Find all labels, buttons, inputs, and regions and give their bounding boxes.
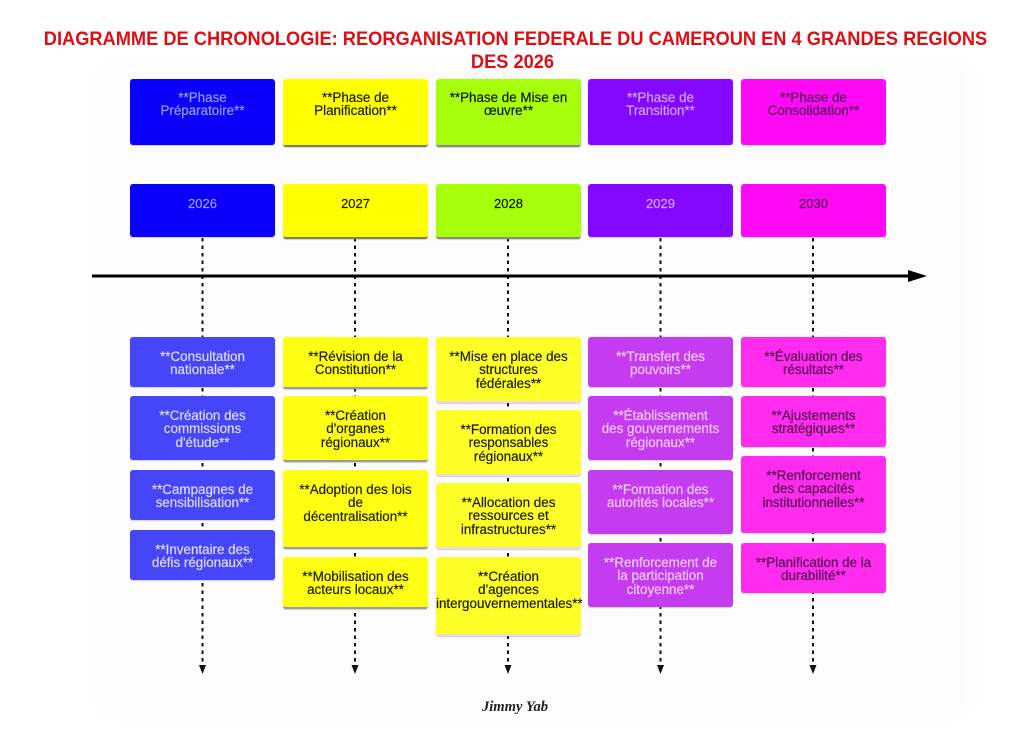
- year 2028: [436, 184, 581, 239]
- dashed connector: 2027: [352, 238, 358, 674]
- year 2028: 2028: [494, 196, 523, 210]
- card: consultation nationale: nationale**: [170, 362, 235, 377]
- card: lois de decentralisation: de: [348, 495, 363, 510]
- card: inventaire des defis: **Inventaire des: [155, 542, 250, 557]
- phase: preparatoire: **Phase: [178, 90, 227, 105]
- card: organes regionaux: régionaux**: [321, 435, 390, 450]
- card: inventaire des defis: défis régionaux**: [152, 555, 253, 570]
- title: [44, 28, 987, 73]
- card: planification de la durabilite: [741, 543, 886, 593]
- card: gouvernements regionaux: [588, 396, 733, 460]
- column 2030 cards: [740, 337, 886, 594]
- card: allocation des ressources: infrastructures**: [461, 522, 556, 537]
- card: consultation nationale: [130, 337, 275, 387]
- dashed connector: 2029: [657, 238, 664, 674]
- card: structures federales: structures: [479, 362, 538, 377]
- timeline arrow: [92, 270, 927, 282]
- year boxes: [130, 184, 886, 240]
- card: planification de la durabilite: **Planification de la: [756, 555, 871, 570]
- phase: mise en oeuvre: **Phase de Mise en: [450, 90, 567, 105]
- card: autorites locales: [588, 470, 733, 534]
- signature: Jimmy Yab: [482, 699, 548, 715]
- card: agences intergouvernementales: d'agences: [478, 582, 539, 597]
- card: participation citoyenne: [588, 543, 733, 607]
- card: allocation des ressources: **Allocation des: [462, 495, 555, 510]
- card: commissions d'etude: **Création des: [159, 408, 246, 423]
- card: consultation nationale: **Consultation: [160, 349, 245, 364]
- card: transfert des pouvoirs: pouvoirs**: [630, 362, 691, 377]
- card: participation citoyenne: **Renforcement de: [604, 555, 717, 570]
- card: evaluation des resultats: **Évaluation des: [764, 349, 863, 364]
- card: lois de decentralisation: décentralisation**: [303, 509, 408, 524]
- year 2026: 2026: [188, 196, 217, 210]
- card: agences intergouvernementales: [436, 557, 581, 636]
- card: ajustements strategiques: **Ajustements: [771, 408, 856, 423]
- phase: planification: [283, 79, 428, 147]
- card: structures federales: fédérales**: [476, 376, 541, 391]
- phase: transition: [588, 79, 733, 145]
- card: revision constitution: Constitution**: [315, 362, 396, 377]
- card: participation citoyenne: la participation: [617, 568, 704, 583]
- card: mobilisation des acteurs: acteurs locaux**: [307, 582, 404, 597]
- card: planification de la durabilite: durabilité**: [781, 568, 846, 583]
- card: participation citoyenne: citoyenne**: [627, 582, 694, 597]
- card: transfert des pouvoirs: [588, 337, 733, 387]
- phase: transition: **Phase de: [627, 90, 694, 105]
- dashed connector: 2030: [810, 238, 816, 674]
- card: formation des responsables: **Formation des: [460, 422, 556, 437]
- card: agences intergouvernementales: **Création: [478, 569, 539, 584]
- year 2029: 2029: [646, 196, 675, 210]
- card: campagnes de sensibilisation: [130, 470, 275, 520]
- card: autorites locales: **Formation des: [612, 482, 708, 497]
- card: gouvernements regionaux: régionaux**: [626, 435, 695, 450]
- card: formation des responsables: responsables: [469, 435, 548, 450]
- title: DES 2026: [471, 51, 554, 73]
- card: lois de decentralisation: **Adoption des lois: [299, 482, 412, 497]
- column 2029 cards: [588, 337, 734, 608]
- dashed connector: 2026: [199, 238, 206, 674]
- phase: preparatoire: [130, 79, 275, 145]
- phase: planification: **Phase de: [322, 90, 389, 105]
- card: capacites institutionnelles: des capacités: [773, 481, 854, 496]
- column 2026 cards: [130, 337, 276, 582]
- year 2030: [741, 184, 886, 237]
- phase: mise en oeuvre: [436, 79, 581, 147]
- phase: transition: Transition**: [626, 103, 695, 118]
- phase: mise en oeuvre: œuvre**: [484, 103, 533, 118]
- card: capacites institutionnelles: [741, 456, 886, 533]
- card: inventaire des defis: [130, 530, 275, 580]
- card: ajustements strategiques: stratégiques**: [772, 421, 855, 436]
- card: lois de decentralisation: [283, 470, 428, 549]
- card: mobilisation des acteurs: [283, 557, 428, 609]
- card: campagnes de sensibilisation: sensibilisation**: [156, 495, 249, 510]
- year 2026: [130, 184, 275, 237]
- card: ajustements strategiques: [741, 396, 886, 447]
- card: formation des responsables: [436, 410, 581, 476]
- card: mobilisation des acteurs: **Mobilisation des: [302, 568, 409, 584]
- year 2027: 2027: [341, 196, 370, 210]
- card: campagnes de sensibilisation: **Campagnes de: [152, 482, 253, 497]
- card: allocation des ressources: [436, 483, 581, 549]
- phase: consolidation: Consolidation**: [768, 103, 859, 118]
- card: evaluation des resultats: [741, 337, 886, 387]
- dashed connector: 2028: [504, 238, 512, 674]
- card: gouvernements regionaux: des gouvernements: [602, 421, 719, 436]
- year 2027: [283, 184, 428, 239]
- card: structures federales: [436, 337, 581, 403]
- card: gouvernements regionaux: **Établissement: [613, 408, 708, 423]
- card: revision constitution: [283, 337, 428, 389]
- card: organes regionaux: **Création: [325, 408, 386, 423]
- card: organes regionaux: [283, 396, 428, 462]
- column 2028 cards: [436, 337, 583, 638]
- card: organes regionaux: d'organes: [326, 421, 385, 436]
- card: allocation des ressources: ressources et: [468, 508, 549, 523]
- card: autorites locales: autorités locales**: [607, 495, 714, 510]
- phase: consolidation: **Phase de: [780, 90, 847, 105]
- year 2030: 2030: [799, 196, 828, 210]
- card: structures federales: **Mise en place des: [449, 349, 568, 364]
- card: capacites institutionnelles: institutionnelles**: [762, 495, 864, 510]
- title: DIAGRAMME DE CHRONOLOGIE: REORGANISATION FEDERALE DU CAMEROUN EN 4 GRANDES REGIONS: [44, 28, 987, 50]
- year 2029: [588, 184, 733, 237]
- card: agences intergouvernementales: intergouvernementales**: [436, 596, 583, 611]
- card: commissions d'etude: d'étude**: [176, 435, 229, 450]
- card: commissions d'etude: commissions: [164, 421, 241, 436]
- phase: planification: Planification**: [314, 103, 397, 118]
- card: transfert des pouvoirs: **Transfert des: [616, 349, 705, 364]
- phase headers: [130, 79, 886, 148]
- phase: consolidation: [741, 79, 886, 145]
- card: commissions d'etude: [130, 396, 275, 460]
- card: formation des responsables: régionaux**: [474, 449, 543, 464]
- card: evaluation des resultats: résultats**: [783, 362, 844, 377]
- phase: preparatoire: Préparatoire**: [160, 103, 245, 118]
- card: capacites institutionnelles: **Renforcement: [766, 468, 861, 483]
- card: revision constitution: **Révision de la: [308, 349, 403, 364]
- column 2027 cards: [282, 337, 428, 610]
